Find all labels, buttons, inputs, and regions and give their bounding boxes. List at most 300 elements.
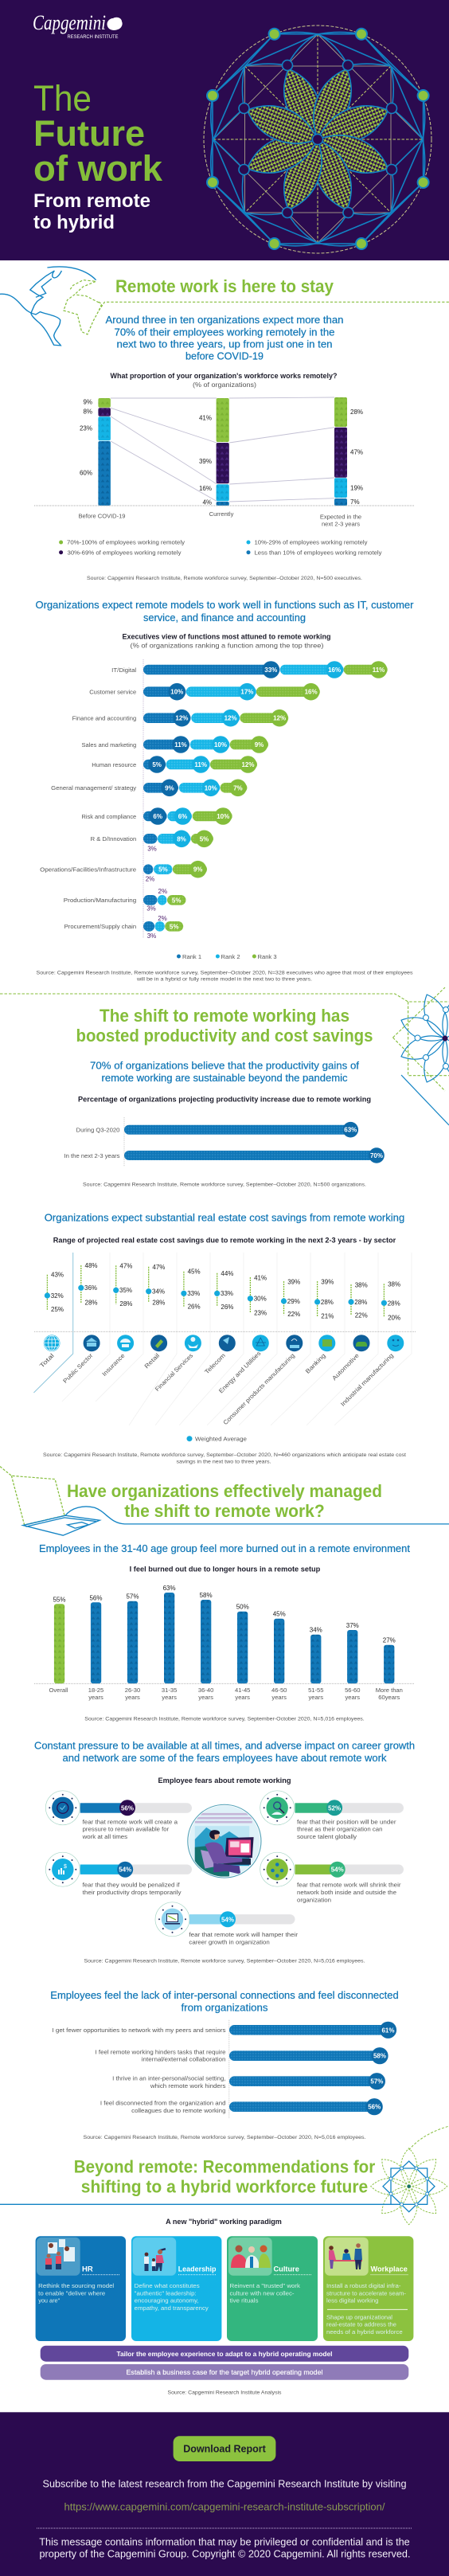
row: General management (143, 779, 247, 796)
chart title: What proportion of your organization's workforce works remotely? (110, 372, 338, 380)
chart: functions ranked: Customer service (89, 688, 136, 696)
chart: burn-out by age: 18-25 (88, 1687, 103, 1694)
illustration: remote worker at desk (187, 1804, 261, 1878)
chart: workforce remote proportion: 19% (350, 484, 363, 491)
fear: shrinking network: 54% (331, 1867, 344, 1874)
text block: burn-out finding: Employees in the 31-40 age group feel more burned out in a remote environment (39, 1543, 411, 1554)
legend: rank: Rank 3 (258, 953, 277, 960)
chart: functions ranked: General management/ strategy (51, 784, 136, 792)
title: The (33, 78, 92, 119)
button: download report (174, 2436, 275, 2461)
row: R and D (143, 830, 213, 852)
subtitle: From remote (33, 190, 150, 212)
legend: weighted average: Weighted Average (195, 1435, 247, 1443)
source: Source: Capgemini Research Institute, Remote workforce survey, September-October 2020, N=5,016 employees. (84, 1717, 365, 1722)
row: Human resource: 5% (152, 761, 162, 768)
source: Source: Capgemini Research Institute, Remote workforce survey, September–October 2020, N=328 executives who agree that most of their employees (37, 970, 413, 975)
heading: managed the shift (67, 1481, 382, 1521)
row: Procurement: 3% (147, 932, 156, 940)
source: Source: Capgemini Research Institute, Remote workforce survey, September–October 2020, N=5,016 employees. (83, 2135, 366, 2140)
panel: Workplace: Workplace (371, 2265, 408, 2273)
fear: availability pressure: pressure to remain available for (83, 1826, 170, 1833)
row: R and D: 8% (177, 835, 186, 842)
chart: burn-out by age: 56-60 (345, 1687, 361, 1694)
chart: productivity: 63% (344, 1127, 357, 1134)
heading: productivity: boosted productivity and cost savings (76, 1026, 373, 1046)
heading: remote work is here to stay: Remote work is here to stay (115, 276, 334, 296)
icon: flower divider (0, 987, 449, 1125)
chart: burn-out by age: Overall (49, 1687, 68, 1694)
chart: productivity: In the next 2-3 years (64, 1152, 120, 1159)
row: Sales and marketing: 11% (174, 741, 187, 749)
legend: remote proportion (59, 539, 382, 556)
sector labels: Total (38, 1351, 56, 1370)
row: Human resource (143, 756, 257, 773)
chart title (110, 372, 338, 389)
panel: Workplace: Install a robust digital infra- (326, 2282, 401, 2289)
panel: HR: to enable "deliver where (38, 2289, 105, 2297)
fear: shrinking network: fear that remote work will shrink their (297, 1882, 401, 1889)
source: Source: Capgemini Research Institute Analysis (167, 2390, 282, 2395)
fear: hampered career growth: fear that remote work will hamper their (189, 1931, 299, 1938)
chart: real estate savings by sector: 23% (254, 1310, 267, 1317)
source: Source: Capgemini Research Institute, Remote workforce survey, September–October 2020, N=5,016 employees. (84, 1959, 365, 1964)
text: legal message (39, 2536, 411, 2560)
chart: burn-out by age: 41-45 (235, 1687, 250, 1694)
chart title: Range of projected real estate cost savings due to remote working in the next 2-3 years - by sector (53, 1237, 396, 1245)
text block: key finding: before COVID-19 (185, 351, 264, 362)
chart: burn-out by age (34, 1585, 415, 1701)
sector labels (38, 1350, 395, 1426)
panel: Culture: culture with new collec- (229, 2289, 295, 2297)
chart: burn-out by age: More than (376, 1687, 403, 1694)
chart: real estate savings by sector: 26% (188, 1304, 201, 1311)
sector labels: Banking (304, 1352, 327, 1375)
chart: functions ranked (40, 659, 388, 940)
illustration: leader with telescope (144, 2248, 166, 2271)
panel: Workplace: real-estate to address the (326, 2321, 396, 2328)
row: Operations (143, 861, 207, 882)
chart: burn-out by age: years (88, 1694, 103, 1701)
row: Risk and compliance (143, 807, 232, 825)
chart: burn-out by age: 45% (273, 1610, 286, 1618)
icon: mandala graphic (204, 25, 431, 253)
source: savings in the next two to three years. (177, 1459, 271, 1465)
panel: HR: Rethink the sourcing model (38, 2282, 115, 2289)
chart: disconnection: colleagues due to remote working (131, 2107, 226, 2114)
fear: shrinking network (260, 1852, 404, 1903)
chart: real estate savings by sector: 25% (51, 1306, 64, 1313)
chart: disconnection: 58% (373, 2053, 386, 2060)
chart: productivity (64, 1117, 385, 1167)
chart: burn-out by age: years (198, 1694, 213, 1701)
chart: real estate savings by sector: 47% (152, 1264, 165, 1271)
row: Operations: 2% (146, 876, 154, 882)
chart: burn-out by age: 56% (89, 1594, 103, 1602)
heading: recommendations: shifting to a hybrid workforce future (81, 2176, 368, 2196)
chart: burn-out by age: 31-35 (162, 1687, 177, 1694)
chart: real estate savings by sector: 22% (287, 1311, 300, 1318)
chart: burn-out by age: years (346, 1694, 360, 1701)
row: Customer service: 16% (305, 689, 318, 696)
chart: real estate savings by sector: 44% (221, 1270, 233, 1277)
chart: workforce remote proportion: 9% (83, 399, 92, 406)
text block: productivity finding: 70% of organizations believe that the productivity gains of (90, 1061, 360, 1072)
fear: position under threat: fear that their position will be under (297, 1818, 396, 1825)
icon: laptop (0, 1467, 449, 1535)
heading: functions (35, 600, 414, 623)
chart: workforce remote proportion: 23% (80, 424, 92, 432)
illustration: diverse colleagues (231, 2246, 271, 2268)
panel: HR: you are" (38, 2297, 60, 2304)
chart: workforce remote proportion: Currently (209, 510, 234, 518)
chart title: Employee fears about remote working (158, 1777, 291, 1784)
row: IT/Digital (143, 661, 388, 678)
chart: real estate savings by sector: 28% (84, 1300, 98, 1307)
chart: disconnection: internal/external collaboration (142, 2056, 226, 2063)
chart: real estate savings by sector: 33% (221, 1290, 233, 1297)
chart: real estate savings by sector: 39% (321, 1278, 334, 1285)
chart: real estate savings by sector: 47% (119, 1263, 132, 1270)
chart: real estate savings by sector: 48% (84, 1262, 98, 1269)
chart: real estate savings by sector: 41% (254, 1274, 267, 1281)
sector labels: Industrial manufacturing (339, 1352, 395, 1408)
panel: Leadership: Define what constitutes (135, 2282, 200, 2289)
row: Production (143, 888, 186, 913)
chart: burn-out by age: 60years (378, 1694, 400, 1701)
chart: productivity: During Q3-2020 (76, 1126, 119, 1134)
chart: real estate savings by sector: 43% (51, 1271, 64, 1278)
row: Procurement: 2% (158, 915, 167, 922)
chart: burn-out by age: years (309, 1694, 323, 1701)
text block: productivity finding (90, 1061, 360, 1084)
row: Risk and compliance: 10% (217, 813, 229, 820)
row: IT/Digital: 33% (264, 666, 277, 674)
chart: workforce remote proportion: 60% (80, 469, 92, 476)
panel: Workplace: less digital working (326, 2297, 379, 2304)
chart: disconnection: 56% (368, 2104, 381, 2111)
panel: Leadership: encouraging autonomy, (135, 2297, 199, 2304)
fear: position under threat (260, 1791, 404, 1840)
chart: burn-out by age: 58% (200, 1592, 213, 1599)
illustration: office team (329, 2243, 362, 2269)
chart: real estate savings by sector: 29% (287, 1298, 300, 1305)
row: Risk and compliance: 6% (178, 813, 187, 820)
sector labels: Automotive (330, 1352, 361, 1382)
chart: real estate savings by sector: 28% (321, 1299, 334, 1306)
chart: real estate savings by sector: 28% (152, 1300, 165, 1307)
panel: HR (36, 2236, 126, 2341)
legend: remote proportion: Less than 10% of employees working remotely (255, 549, 382, 556)
row: Sales and marketing: 10% (214, 741, 227, 749)
row: Procurement: 5% (170, 923, 178, 930)
panel: Workplace: Shape up organizational (326, 2313, 392, 2320)
chart: workforce remote proportion: Before COVID-19 (78, 513, 126, 520)
sector labels: Energy and Utilities (217, 1350, 263, 1394)
chart: workforce remote proportion: 7% (350, 498, 360, 506)
row: Finance and accounting: 12% (175, 715, 188, 722)
fear: penalized for productivity: 54% (119, 1867, 131, 1874)
chart: burn-out by age: 51-55 (308, 1687, 324, 1694)
text: subscribe: Subscribe to the latest research from the Capgemini Research Institute by visiting (43, 2477, 406, 2489)
title (33, 78, 163, 189)
chart: real estate savings by sector: 36% (84, 1284, 97, 1292)
panel: Workplace (323, 2236, 413, 2341)
chart: burn-out by age: 27% (383, 1637, 396, 1644)
chart: functions ranked: Production/Manufacturing (64, 897, 136, 904)
chart: burn-out by age: 46-50 (271, 1687, 287, 1694)
row: General management: 7% (233, 784, 243, 792)
sector labels: Insurance (100, 1352, 127, 1378)
fear: penalized for productivity (45, 1852, 192, 1896)
chart: workforce remote proportion: 39% (199, 458, 212, 465)
chart: functions ranked: Operations/Facilities/Infrastructure (40, 866, 136, 873)
heading: productivity (76, 1006, 373, 1046)
chart: real estate savings by sector: 38% (388, 1281, 400, 1288)
legend: rank (177, 953, 277, 960)
chart: burn-out by age: years (125, 1694, 140, 1701)
fear: penalized for productivity: fear that they would be penalized if (83, 1882, 181, 1889)
chart title: A new "hybrid" working paradigm (166, 2218, 282, 2226)
heading: employee fears: and network are some of the fears employees have about remote work (62, 1753, 387, 1764)
chart: functions ranked: Human resource (92, 761, 136, 768)
chart: disconnection: I feel disconnected from the organization and (100, 2100, 226, 2107)
chart: disconnection: 57% (370, 2078, 383, 2085)
heading: managed the shift: Have organizations effectively managed (67, 1481, 382, 1501)
chart: workforce remote proportion: 16% (199, 485, 212, 492)
source: Source: Capgemini Research Institute, Remote workforce survey, September–October 2020, N=500 executives. (87, 576, 362, 581)
fear: availability pressure (45, 1791, 192, 1840)
chart: functions ranked: Sales and marketing (81, 741, 136, 749)
chart: disconnection: I feel remote working hinders tasks that require (96, 2048, 226, 2055)
chart: real estate savings by sector: 28% (388, 1300, 400, 1307)
chart: workforce remote proportion: 8% (83, 408, 92, 415)
fear: shrinking network: network both inside and outside the (297, 1889, 396, 1896)
sector labels: Retail (143, 1351, 161, 1370)
heading: functions: service, and finance and accounting (143, 612, 306, 623)
row: Customer service (143, 683, 320, 701)
chart title: I feel burned out due to longer hours in a remote setup (130, 1566, 321, 1573)
row: Finance and accounting: 12% (224, 715, 237, 722)
chart: burn-out by age: 36-40 (198, 1687, 213, 1694)
sector labels: Public Sector (61, 1351, 95, 1385)
row: Production: 5% (172, 897, 181, 904)
fear: shrinking network: organization (297, 1896, 331, 1903)
fear: position under threat: 52% (328, 1804, 341, 1812)
subtitle (33, 190, 150, 233)
subtitle: to hybrid (33, 212, 115, 233)
row: General management: 10% (205, 784, 217, 792)
chart title: (% of organizations) (193, 381, 256, 389)
chart: real estate savings by sector: 38% (355, 1281, 368, 1288)
legend: remote proportion: 70%-100% of employees working remotely (67, 539, 185, 546)
chart: burn-out by age: 63% (163, 1585, 176, 1592)
row: Finance and accounting: 12% (273, 715, 286, 722)
heading: recommendations (74, 2156, 376, 2196)
chart: real estate savings by sector (33, 1253, 416, 1426)
chart: functions ranked: Procurement/Supply chain (64, 923, 136, 930)
text block: key finding (105, 315, 344, 362)
chart: burn-out by age: years (271, 1694, 287, 1701)
fear: position under threat: source talent globally (297, 1833, 357, 1840)
source: will be in a hybrid or fully remote model in the next two to three years. (136, 977, 312, 983)
chart: workforce remote proportion: 47% (350, 449, 363, 456)
source (37, 970, 413, 983)
illustration: HR people (45, 2239, 75, 2269)
panel: Culture: tive rituals (229, 2297, 259, 2304)
fear: availability pressure: fear that remote work will create a (83, 1818, 178, 1825)
chart: real estate savings by sector: 45% (188, 1268, 201, 1276)
chart: workforce remote proportion: next 2-3 years (322, 521, 360, 528)
fear: penalized for productivity: $ (64, 1864, 67, 1870)
chart: burn-out by age: 50% (236, 1604, 249, 1610)
chart: disconnection (53, 2020, 396, 2118)
title: of work (33, 148, 163, 189)
heading: employee fears: Constant pressure to be available at all times, and adverse impact on career growth (34, 1741, 415, 1752)
chart: burn-out by age: 57% (126, 1593, 139, 1601)
chart: burn-out by age: 26-30 (125, 1687, 140, 1694)
chart: burn-out by age: 37% (346, 1622, 359, 1629)
row: Procurement (143, 915, 183, 940)
row: Risk and compliance: 6% (153, 813, 162, 820)
link: subscription URL: https://www.capgemini.com/capgemini-research-institute-subscription/ (64, 2501, 385, 2513)
chart: disconnection: 61% (381, 2027, 395, 2034)
chart: real estate savings by sector: 34% (152, 1288, 165, 1295)
text: legal message: property of the Capgemini Group. Copyright © 2020 Capgemini. All rights reserved. (40, 2548, 411, 2560)
row: Finance and accounting (143, 709, 288, 726)
chart: real estate savings by sector: 28% (119, 1300, 132, 1308)
heading: real estate savings: Organizations expect substantial real estate cost savings from remote working (45, 1212, 404, 1223)
banner: employee experience: Tailor the employee experience to adapt to a hybrid operating model (116, 2350, 333, 2358)
text block: key finding: Around three in ten organizations expect more than (105, 315, 344, 326)
icons: sectors (44, 1335, 404, 1351)
button: download report: Download Report (183, 2442, 266, 2454)
fear: penalized for productivity: their productivity drops temporarily (83, 1889, 182, 1896)
chart: real estate savings by sector: 21% (321, 1313, 334, 1320)
chart: workforce remote proportion: 41% (199, 415, 212, 422)
row: Production: 2% (158, 888, 167, 895)
chart: functions ranked: Finance and accounting (72, 715, 136, 721)
panel: Leadership: Leadership (178, 2265, 217, 2273)
fear: hampered career growth (155, 1902, 299, 1945)
panel: Culture: Culture (274, 2265, 299, 2273)
banner: employee experience (41, 2346, 408, 2362)
heading: disconnection: Employees feel the lack of inter-personal connections and feel disconnected (50, 1990, 399, 2001)
chart: real estate savings by sector: 35% (119, 1287, 132, 1294)
chart title (123, 633, 331, 650)
legend: rank: Rank 2 (221, 953, 240, 960)
fear: position under threat: threat as their organization can (297, 1826, 382, 1833)
heading: recommendations: Beyond remote: Recommendations for (74, 2156, 376, 2176)
sector labels: Consumer products manufacturing (222, 1352, 296, 1426)
chart: real estate savings by sector: 30% (254, 1296, 267, 1303)
text: legal message: This message contains information that may be privileged or confidential and is the (39, 2536, 410, 2548)
heading: disconnection: from organizations (182, 2002, 267, 2013)
row: General management: 9% (165, 784, 174, 792)
heading: functions: Organizations expect remote models to work well in functions such as IT, customer (35, 600, 414, 611)
row: R and D: 5% (200, 835, 209, 842)
row: Production: 3% (146, 905, 156, 913)
row: IT/Digital: 16% (328, 666, 341, 674)
panel: Leadership (131, 2236, 221, 2341)
source: Source: Capgemini Research Institute, Remote workforce survey, September–October 2020, N=460 organizations which anticipate real estate cost (43, 1452, 406, 1458)
chart: burn-out by age: years (235, 1694, 250, 1701)
icon: star divider (0, 2126, 449, 2225)
chart: real estate savings by sector: 39% (287, 1279, 300, 1286)
panel: HR: HR (82, 2265, 93, 2273)
heading: disconnection (50, 1990, 399, 2013)
panel: Culture (227, 2236, 318, 2341)
panel: Leadership: "authentic" leadership: (135, 2289, 197, 2297)
logo: Capgemini Research Institute: RESEARCH INSTITUTE (67, 35, 118, 40)
chart: real estate savings by sector: 26% (221, 1304, 233, 1311)
chart title: Percentage of organizations projecting productivity increase due to remote working (78, 1095, 371, 1103)
panel: header banner (0, 0, 449, 260)
fear: availability pressure: work at all times (82, 1833, 127, 1840)
fear: hampered career growth: career growth in organization (189, 1938, 270, 1945)
chart: functions ranked: IT/Digital (111, 666, 137, 674)
chart: workforce remote proportion: 4% (202, 498, 212, 506)
chart: workforce remote proportion: Expected in the (320, 513, 361, 520)
chart: disconnection: I get fewer opportunities to network with my peers and seniors (53, 2027, 226, 2034)
source: Source: Capgemini Research Institute, Remote workforce survey, September–October 2020, N=500 organizations. (83, 1182, 366, 1188)
row: R and D: 3% (147, 846, 157, 852)
logo: Capgemini Research Institute: Capgemini (33, 11, 106, 34)
chart title: (% of organizations ranking a function among the top three) (131, 642, 324, 650)
title: Future (33, 113, 145, 154)
row: Sales and marketing (143, 736, 268, 753)
legend: remote proportion: 10%-29% of employees working remotely (255, 539, 368, 546)
panel: Workplace: needs of a hybrid workforce (326, 2328, 403, 2336)
panel: footer (0, 2412, 449, 2576)
chart: real estate savings by sector: 22% (355, 1311, 368, 1319)
chart: functions ranked: R & D/Innovation (91, 835, 136, 842)
text block: key finding: next two to three years, up from just one in ten (116, 339, 333, 350)
text block: productivity finding: remote working are sustainable beyond the pandemic (102, 1073, 347, 1084)
chart: real estate savings by sector: 33% (187, 1290, 200, 1297)
chart title: Executives view of functions most attuned to remote working (123, 633, 331, 641)
heading: productivity: The shift to remote working has (100, 1006, 349, 1026)
banner: business case: Establish a business case for the target hybrid operating model (126, 2368, 323, 2376)
fear: hampered career growth: 54% (221, 1916, 234, 1923)
banner: business case (41, 2364, 408, 2380)
icon: world map (0, 267, 449, 346)
panel: Leadership: empathy, and transparency (135, 2304, 209, 2312)
chart: burn-out by age: 55% (53, 1596, 66, 1604)
panel: Workplace: structure to accelerate seam- (326, 2289, 406, 2297)
row: Operations: 5% (158, 866, 168, 874)
legend: rank: Rank 1 (182, 953, 201, 960)
row: Human resource: 11% (194, 761, 207, 768)
sector labels: Financial Services (154, 1352, 194, 1393)
source (43, 1452, 406, 1465)
fear: availability pressure: 56% (121, 1804, 134, 1812)
chart: productivity: 70% (370, 1152, 383, 1159)
legend: remote proportion: 30%-69% of employees working remotely (67, 549, 182, 556)
panel: Culture: Reinvent a "trusted" work (229, 2282, 300, 2289)
chart: functions ranked: Risk and compliance (81, 813, 136, 820)
chart: burn-out by age: years (162, 1694, 177, 1701)
chart: burn-out by age: 34% (310, 1626, 322, 1634)
chart: real estate savings by sector: 28% (354, 1299, 367, 1306)
row: IT/Digital: 11% (373, 666, 385, 674)
row: Human resource: 12% (241, 761, 255, 768)
row: Customer service: 17% (240, 689, 253, 696)
chart: real estate savings by sector: 32% (51, 1292, 64, 1300)
chart: workforce remote proportion: 28% (350, 408, 363, 416)
chart: disconnection: I thrive in an inter-personal/social setting, (112, 2075, 226, 2082)
chart: workforce remote proportion (34, 397, 414, 528)
